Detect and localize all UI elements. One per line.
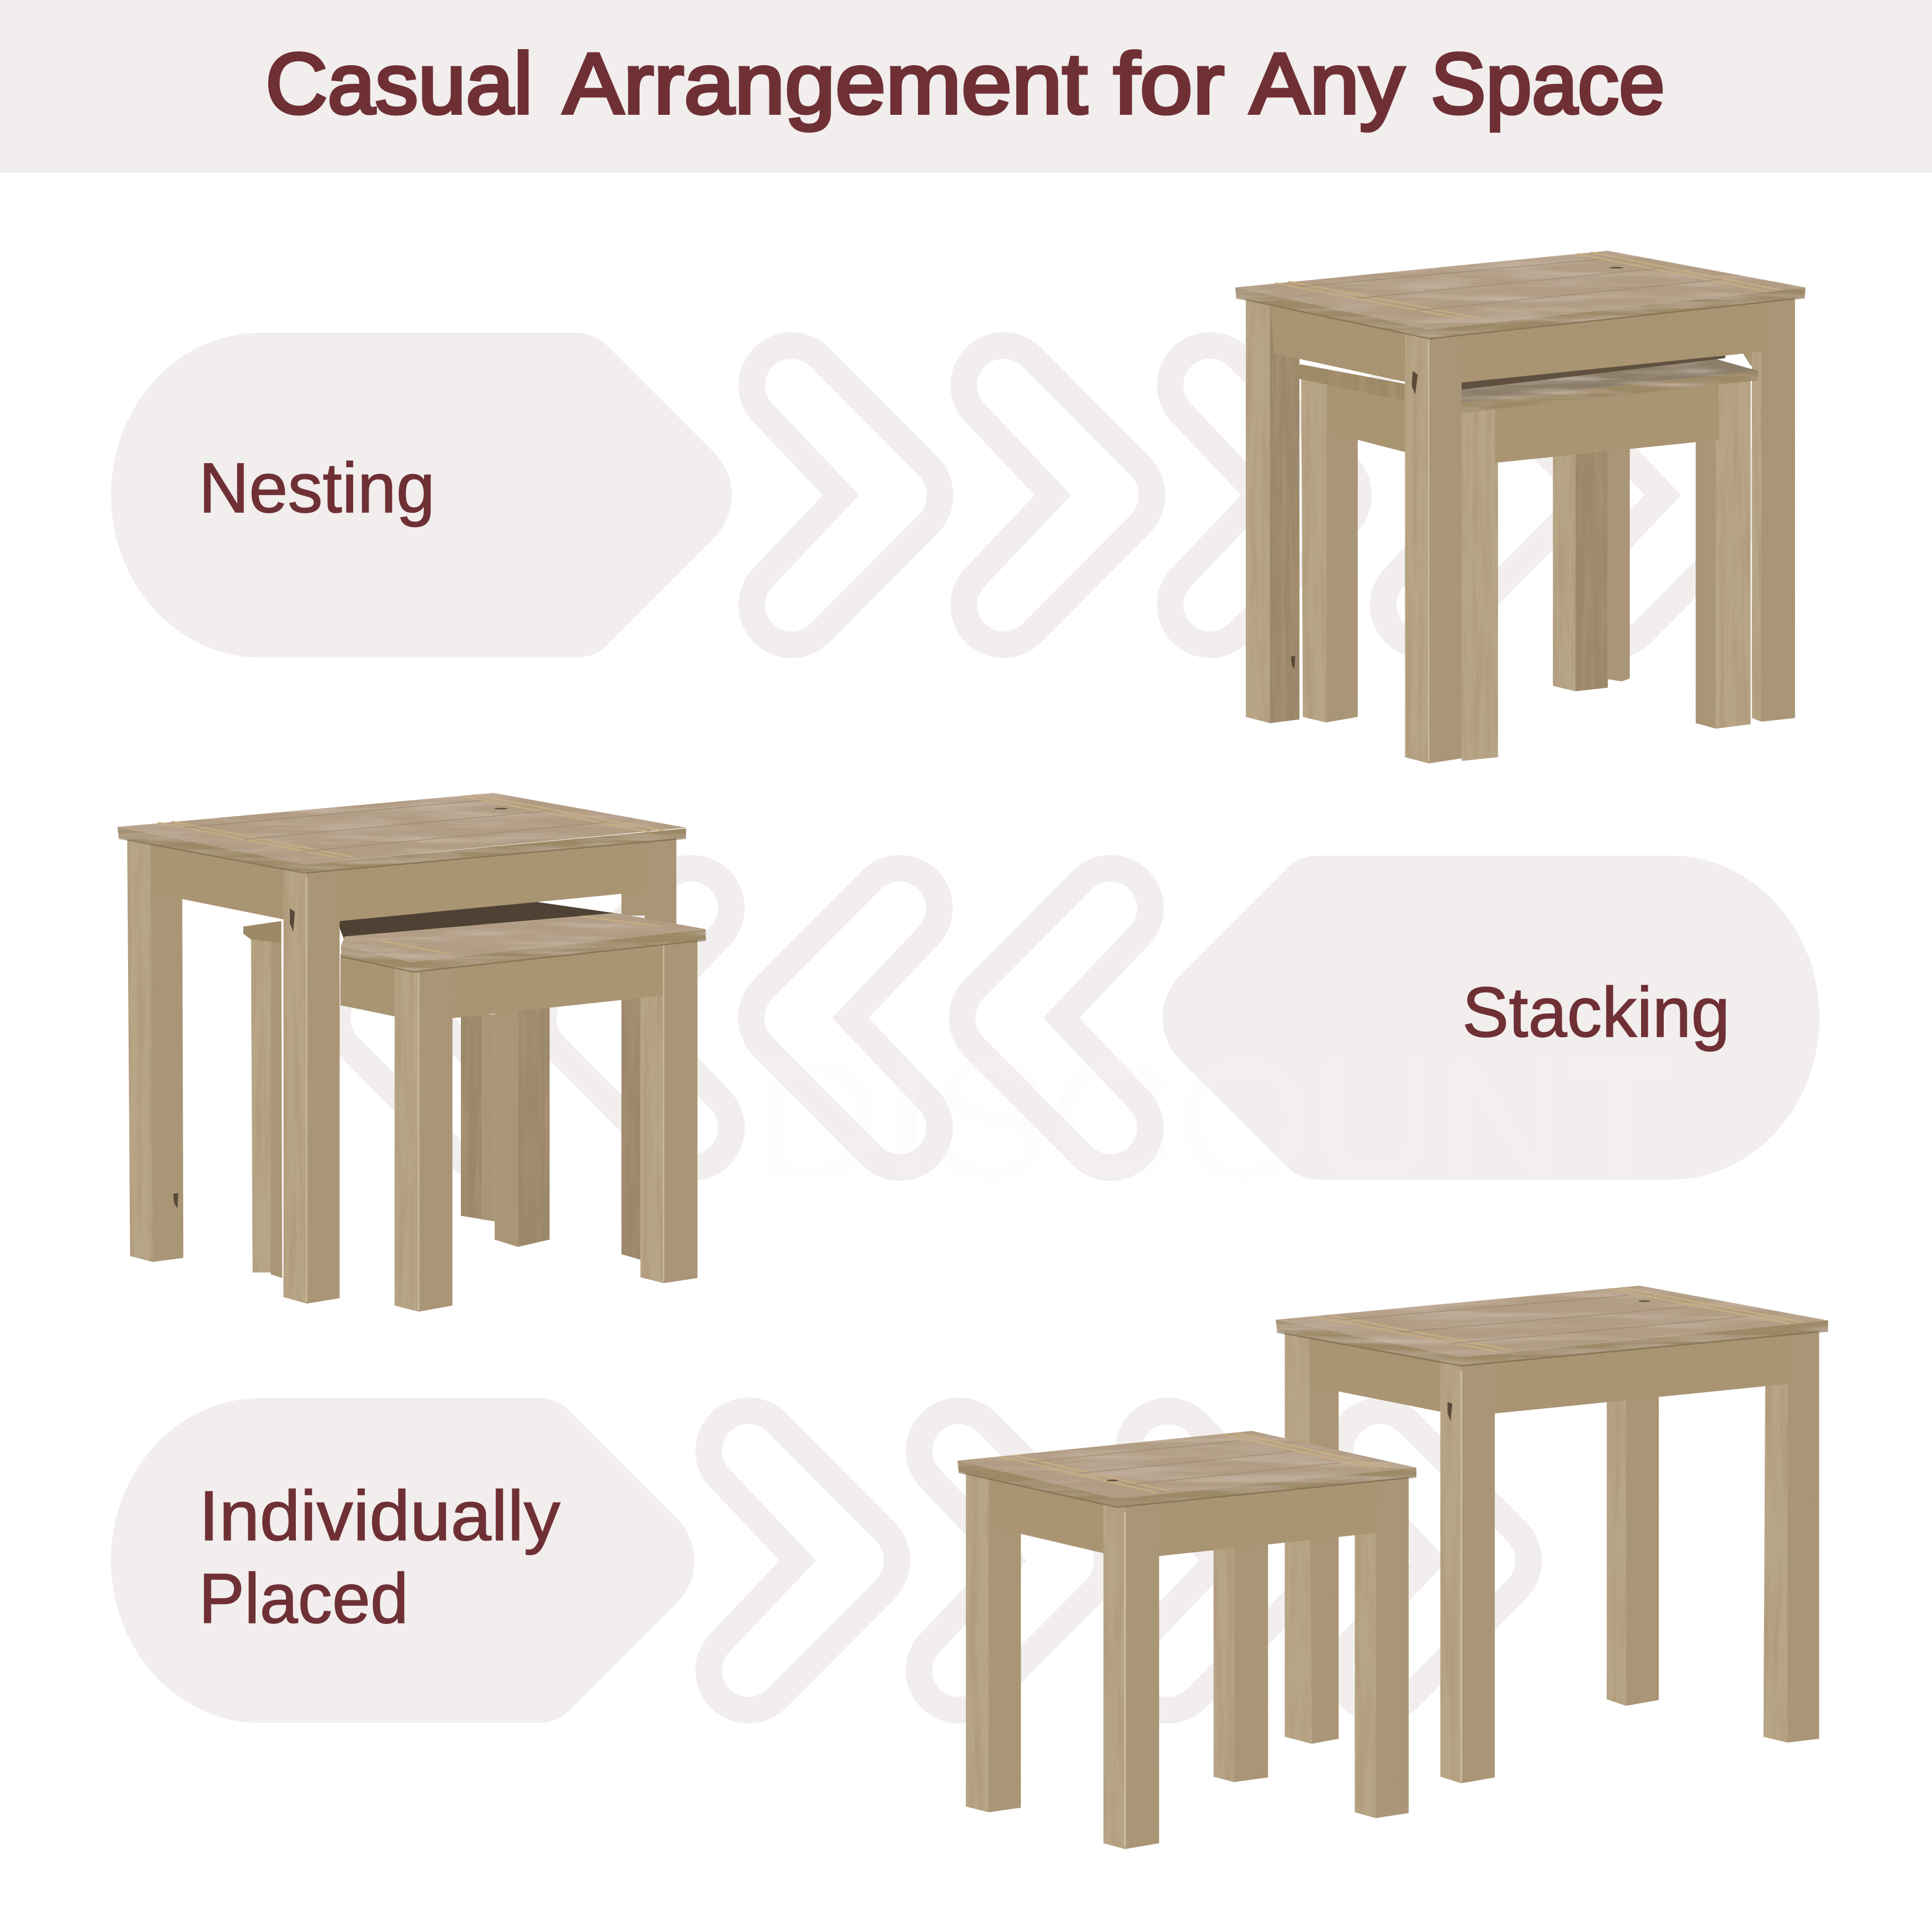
label pill: Stacking: Stacking [1462, 973, 1730, 1052]
title: for [1113, 36, 1224, 132]
label pill: Stacking [1163, 856, 1819, 1180]
label pill: Individually Placed: Individually [199, 1477, 560, 1556]
title: Arrangement [563, 36, 1087, 132]
label pill: Nesting: Nesting [199, 449, 435, 528]
table set: nesting [1235, 251, 1806, 763]
header band [0, 0, 1932, 173]
table set: individually placed [958, 1286, 1828, 1849]
small table [958, 1431, 1416, 1849]
title: Space [1431, 36, 1665, 132]
label pill: Nesting [111, 333, 732, 657]
chevron arrows: stacking row [337, 868, 1150, 1167]
title: Any [1250, 36, 1404, 132]
watermark: DISCOUNT [756, 1026, 1673, 1214]
chevron arrows: individually placed row [709, 1411, 1528, 1710]
label pill: Individually Placed: Placed [199, 1559, 408, 1638]
title: Casual [266, 36, 533, 132]
table set: stacking [118, 793, 706, 1312]
label pill: Individually Placed [111, 1398, 694, 1723]
large table [1276, 1286, 1828, 1784]
chevron arrows: nesting row [752, 346, 1762, 645]
